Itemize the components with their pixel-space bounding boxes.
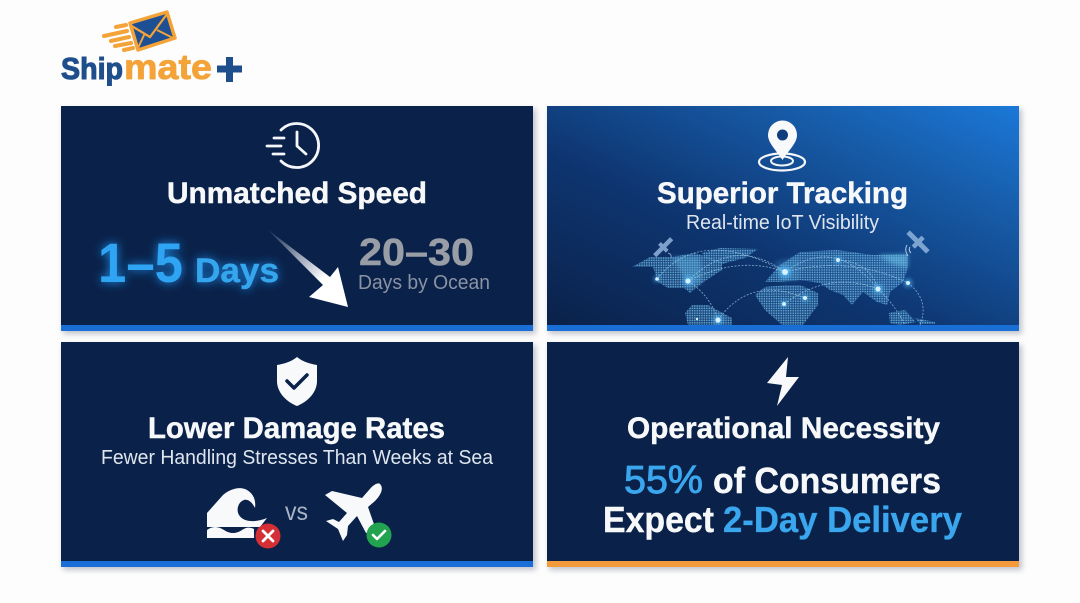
panel: Unmatched Speed [61,106,536,334]
icon: satellite left [651,235,676,260]
heading: Superior Tracking [657,177,908,210]
icon: shield check [277,357,317,406]
vs label: vs [285,498,308,526]
world map [632,248,935,325]
stat: 55% of consumers: of Consumers [713,460,941,501]
stat: expect 2-day delivery [603,499,962,540]
panel: Lower Damage Rates [61,342,536,570]
stat: 1-5 days: Days [195,252,279,290]
heading: Lower Damage Rates [148,412,445,445]
icon: flying envelope [104,12,175,50]
arrow [267,229,348,307]
heading: Operational Necessity [627,412,940,445]
icon: location pin [759,120,805,170]
icon: fast clock [267,124,319,168]
icon: satellite right [903,227,933,257]
stat: expect 2-day delivery: 2-Day Delivery [723,499,962,540]
heading: Unmatched Speed [167,177,427,210]
stat: 20-30 days by ocean: 20–30 [359,232,474,274]
wordmark: mate [124,48,212,87]
subheading: Fewer Handling Stresses Than Weeks at Sea [101,447,494,469]
panel: Operational Necessity [547,342,1022,570]
stat: 1-5 days [98,231,279,294]
wordmark: Ship [61,51,123,86]
stat: 55% of consumers [624,459,941,502]
icon: plus [217,57,242,82]
stat: 1-5 days: 1–5 [98,231,183,294]
stat: 20-30 days by ocean: Days by Ocean [358,272,490,294]
panel: Superior Tracking [547,106,1022,334]
icon: lightning bolt [767,357,799,406]
stat: 1-5 days: Days [195,252,279,290]
stat: 55% of consumers: 55% [624,459,703,502]
subheading: Real-time IoT Visibility [686,212,879,234]
stat: 20-30 days by ocean [358,232,490,294]
stat: 1-5 days: 1–5 [98,231,183,294]
icon: plane with green check [325,483,392,548]
stat: expect 2-day delivery: Expect [603,499,714,540]
logo: Shipmate+ [61,12,242,87]
wordmark [61,48,212,87]
icon: wave with red cross [207,488,280,548]
